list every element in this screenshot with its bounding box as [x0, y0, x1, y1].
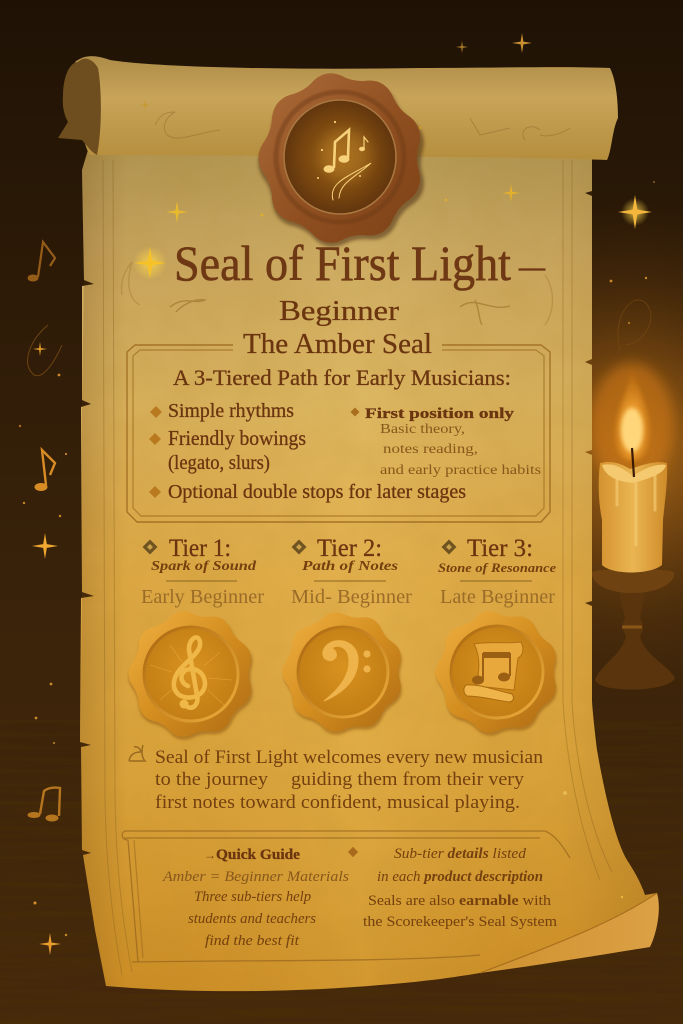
heading: 3-tiered path: A 3-Tiered Path for Early Musicians:	[173, 365, 511, 390]
roll curl left	[58, 59, 101, 155]
quick guide frame	[122, 831, 570, 962]
list: right column: notes reading,	[383, 442, 478, 457]
seal outer wax	[258, 73, 420, 243]
tier 3 wax seal with scroll and notes	[436, 611, 557, 736]
list: left bullets: Optional double stops for later stages	[168, 481, 466, 503]
list: left bullets: Friendly bowings	[168, 426, 306, 450]
candle flame	[590, 363, 674, 487]
quick guide left column: find the best fit	[205, 933, 300, 949]
candle on a holder	[590, 363, 675, 690]
heading: the amber seal: The Amber Seal	[243, 329, 432, 360]
welcome paragraph: first notes toward confident, musical playing.	[155, 792, 520, 813]
tier 3 heading: Stone of Resonance	[438, 560, 556, 575]
tier 2 wax seal with bass clef	[283, 612, 402, 735]
quick guide right column: Seals are also earnable with	[368, 893, 552, 909]
tier 1 heading	[142, 535, 257, 574]
tier 2 heading: Path of Notes	[302, 559, 399, 574]
seal rim highlight	[276, 92, 404, 222]
tier 3 column	[436, 535, 557, 736]
parchment body	[80, 150, 657, 991]
quick guide left column: students and teachers	[188, 911, 316, 927]
quick guide left column	[162, 847, 349, 949]
quick guide left column: Three sub-tiers help	[194, 889, 311, 905]
floating notes and sparkles on the left	[19, 242, 67, 955]
welcome paragraph: Seal of First Light welcomes every new musician	[155, 747, 544, 768]
quick guide left column: Quick Guide	[216, 847, 300, 863]
panel: quick guide	[122, 831, 570, 962]
page curl bottom right	[480, 893, 659, 973]
tier 1 level: Early Beginner	[141, 586, 264, 608]
candle body	[599, 448, 667, 572]
tier 1 wax seal with treble clef	[129, 611, 253, 740]
tier 1 heading: Tier 1:	[169, 535, 231, 562]
panel: the amber seal	[127, 329, 550, 522]
list: right column: First position only	[365, 406, 515, 422]
parchment inner border lines	[103, 160, 612, 975]
panel frame	[127, 345, 550, 522]
welcome paragraph: guiding them from their very	[291, 769, 525, 790]
list: left bullets: (legato, slurs)	[168, 452, 270, 474]
icon: glowing music notes	[317, 121, 371, 200]
parchment shading	[80, 150, 657, 991]
tier 3 level: Late Beginner	[440, 586, 555, 608]
icon: note upper left	[28, 242, 55, 282]
icon: note middle left	[34, 450, 55, 491]
parchment sparkles	[133, 100, 623, 898]
quick guide right column: the Scorekeeper's Seal System	[363, 914, 557, 930]
list: left bullets	[149, 400, 466, 503]
top roll	[58, 56, 618, 160]
title: –	[518, 243, 546, 288]
parchment flourishes	[122, 262, 552, 325]
parchment texture	[586, 192, 590, 194]
seal inner disc	[284, 100, 396, 214]
quick guide right column: Sub-tier details listed	[394, 846, 527, 862]
subtitle: Beginner	[279, 295, 399, 327]
list: right column	[350, 406, 541, 478]
icon: note lower left	[28, 788, 60, 822]
tier 1 heading: Spark of Sound	[151, 559, 257, 574]
sparkles on the upper right	[456, 33, 655, 350]
quick guide diamond	[348, 847, 358, 857]
tier 2 level: Mid- Beginner	[291, 586, 412, 608]
quick guide left column: →	[204, 848, 216, 862]
quick guide left column: Amber = Beginner Materials	[162, 869, 349, 885]
tier 3 heading	[438, 535, 556, 575]
tier 2 column	[283, 535, 412, 735]
roll ornaments	[155, 112, 570, 140]
quick guide right column	[363, 846, 557, 930]
list: right column: and early practice habits	[380, 463, 541, 478]
swirl	[28, 325, 62, 376]
welcome paragraph	[129, 745, 544, 813]
candle holder	[592, 569, 675, 690]
list: right column: Basic theory,	[380, 422, 465, 437]
tier 2 heading: Tier 2:	[317, 535, 382, 562]
tier 1 column	[129, 535, 264, 740]
tier 3 divider	[460, 580, 532, 582]
list: left bullets: Simple rhythms	[168, 400, 294, 422]
main wax seal	[258, 73, 424, 247]
tier 2 divider	[314, 580, 386, 582]
tier 1 divider	[166, 580, 237, 582]
icon: small outlined glyph	[129, 745, 145, 761]
tier 3 heading: Tier 3:	[467, 535, 533, 562]
welcome paragraph: to the journey	[155, 769, 269, 790]
tier 2 heading	[292, 535, 399, 574]
quick guide right column: in each product description	[377, 869, 543, 885]
title: Seal of First Light	[174, 235, 511, 291]
seal shadow	[258, 79, 424, 247]
